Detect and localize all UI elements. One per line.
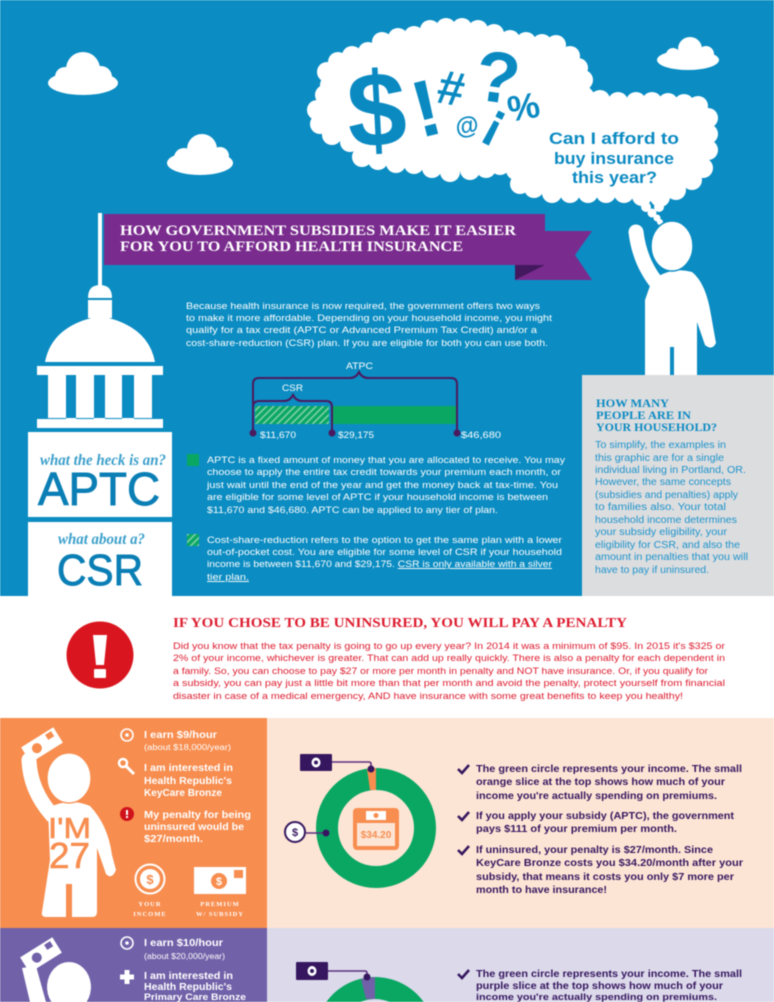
plan fact [120,970,246,1002]
symbol characters: ! [402,62,450,155]
symbol characters: @ [453,111,481,141]
plan fact [119,759,233,799]
checklist: income you're actually spending on premiums. [476,992,717,1002]
chart: APTC and CSR income ranges: $11,670 [260,430,296,441]
banner heading [120,223,516,255]
sidebar body: However, the same concepts [595,477,731,488]
penalty fact: uninsured would be [144,822,244,833]
income fact [121,729,231,752]
chart: APTC and CSR income ranges: $46,680 [461,430,501,441]
checklist: income you're actually spending on premiums. [476,791,717,802]
panel: what is APTC: what the heck is an? [40,452,166,469]
sidebar body: to families also. Your total [595,502,726,513]
symbol characters: ¡ [476,92,518,151]
sidebar heading [596,398,717,434]
legend: APTC description: choose to apply the entire tax credit towards your premium each month, or [207,467,562,478]
banner ribbon [104,214,592,280]
chart: APTC and CSR income ranges: $29,175 [338,430,374,441]
sidebar body: household income determines [595,515,737,526]
symbol characters: $ [344,50,409,171]
panel: orange profile [0,718,267,928]
icon: your income: $ [146,872,154,887]
penalty text: a subsidy, you can pay just a little bit more than that per month and avoid the penalty, protect yourself from financial [173,678,725,689]
donut chart: income vs premium [285,754,425,877]
panel: what about CSR [28,522,172,596]
icon: red alert circle [66,622,134,688]
checklist: If you apply your subsidy (APTC), the government [476,811,735,822]
intro text: to make it more affordable. Depending on your household income, you might [186,313,552,324]
icon: capitol building [37,213,163,428]
checklist: If uninsured, your penalty is $27/month. Since [476,845,713,856]
penalty text: Did you know that the tax penalty is going to go up every year? In 2014 it was a minimum of $95. In 2015 it's $325 or [173,641,726,652]
sidebar heading: HOW MANY [596,398,670,410]
legend: CSR description: tier plan. [207,572,249,583]
icon: premium with subsidy [194,867,246,918]
panel: what about CSR: what about a? [58,531,145,548]
penalty fact: My penalty for being [144,810,251,821]
symbol characters [344,35,543,171]
panel: what is APTC [28,432,172,517]
banner heading: HOW GOVERNMENT SUBSIDIES MAKE IT EASIER [120,223,516,239]
symbol characters: % [504,84,543,130]
icon: small cloud right [657,37,719,70]
sidebar body: your subsidy eligibility, your [595,527,728,538]
cloud question: buy insurance [554,150,674,168]
icon: your income: YOUR [138,901,162,908]
plan fact: KeyCare Bronze [144,788,222,799]
chart: APTC and CSR income ranges: ATPC [346,361,373,372]
sidebar body: (subsidies and penalties) apply [595,490,738,501]
checklist: orange slice at the top shows how much of your [476,777,725,788]
checklist: KeyCare Bronze costs you $34.20/month after your [476,858,743,869]
icon: person with raised arm [636,221,716,375]
panel: peach explanation [267,718,774,928]
chart: APTC and CSR income ranges: CSR [282,383,303,394]
legend: CSR description [187,534,563,583]
panel: lavender explanation [267,928,774,1002]
penalty fact [120,807,251,845]
intro text: Because health insurance is now required, the government offers two ways [186,301,540,312]
cloud question [549,130,679,187]
icon: person holding bill, age 27 [21,727,116,917]
sidebar body [595,440,748,576]
panel: purple profile [0,928,267,1002]
legend: CSR description: out-of-pocket cost. You are eligible for some level of CSR if your household [207,547,562,558]
checklist: The green circle represents your income. The small [476,764,742,775]
plan fact: I am interested in [144,971,233,982]
income fact: (about $18,000/year) [144,743,231,752]
intro text: qualify for a tax credit (APTC or Advanced Premium Tax Credit) and/or a [186,325,538,336]
legend: CSR description: income is between $11,670 and $29,175. CSR is only available with a silver [207,559,553,570]
thought cloud [307,18,718,225]
icon: your income [133,864,167,918]
sidebar body: eligibility for CSR, and also the [595,540,740,551]
penalty text: disaster in case of a medical emergency, AND have insurance with some great benefits to keep you healthy! [173,691,683,702]
icon: your income: INCOME [133,911,167,918]
sidebar body: this graphic are for a single [595,453,724,464]
legend: APTC description: are eligible for some level of APTC if your household income is between [207,492,548,503]
checklist: month to have insurance! [476,885,607,896]
symbol characters: ? [470,35,525,121]
icon: premium with subsidy: PREMIUM [200,901,240,908]
intro text [186,301,552,349]
income fact [121,937,225,961]
symbol characters: # [433,61,469,117]
income fact: I earn $9/hour [144,730,217,741]
icon: premium with subsidy: W/ SUBSIDY [196,911,244,918]
legend: APTC description: APTC is a fixed amount of money that you are allocated to receive. You may [207,455,565,466]
panel: what about CSR: CSR [57,546,143,595]
icon: person holding bill, age 27: 27 [49,835,90,876]
checklist [458,764,743,896]
icon: small cloud left [48,52,118,95]
plan fact: Primary Care Bronze [144,992,246,1002]
panel: what is APTC: APTC [38,463,160,515]
penalty text: 2% of your income, whichever is greater. That can add up really quickly. There is also a penalty for each dependent in [173,653,725,664]
income fact: I earn $10/hour [144,938,223,949]
legend: APTC description [187,454,565,516]
sidebar heading: YOUR HOUSEHOLD? [596,422,717,434]
plan fact: I am interested in [144,763,233,774]
icon: dark bill [296,962,328,980]
sidebar body: individual living in Portland, OR. [595,465,746,476]
chart: APTC and CSR income ranges [250,361,501,441]
checklist [458,969,742,1002]
legend: APTC description: $11,670 and $46,680. APTC can be applied to any tier of plan. [207,505,498,516]
icon: premium with subsidy: $ [216,876,222,888]
donut chart: income vs premium [296,962,424,1002]
checklist: pays $111 of your premium per month. [476,824,677,835]
checklist: subsidy, that means it costs you only $7 more per [476,872,734,883]
penalty heading: IF YOU CHOSE TO BE UNINSURED, YOU WILL PAY A PENALTY [173,615,627,630]
checklist: purple slice at the top shows how much of your [476,981,723,992]
penalty text [173,641,726,702]
banner heading: FOR YOU TO AFFORD HEALTH INSURANCE [120,239,463,255]
legend: CSR description: Cost-share-reduction refers to the option to get the same plan with a lower [207,535,563,546]
sidebar heading: PEOPLE ARE IN [596,410,692,422]
sidebar body: To simplify, the examples in [595,440,726,451]
icon: person holding bill, age 27: I'M [48,813,91,845]
penalty fact: $27/month. [144,834,203,845]
icon: dollar circle: $ [292,827,298,839]
icon: small cloud centre [167,134,233,175]
icon: premium amount: $34.20 [361,830,392,841]
penalty text: a family. So, you can choose to pay $27 or more per month in penalty and NOT have insurance. Or, if you qualify for [173,666,709,677]
income fact: (about $20,000/year) [144,952,225,961]
sidebar body: have to pay if uninsured. [595,565,709,576]
panel: household sidebar [582,375,774,596]
sidebar body: amount in penalties that you will [595,552,748,563]
panel: blue header background [0,0,774,596]
plan fact: Health Republic's [144,776,232,787]
legend: APTC description: just wait until the end of the year and get the money back at tax-time. You [206,480,558,491]
checklist: The green circle represents your income. The small [476,969,742,980]
cloud question: this year? [572,169,657,187]
plan fact: Health Republic's [144,982,232,993]
cloud question: Can I afford to [549,130,679,148]
icon: dark bill [300,754,332,771]
intro text: cost-share-reduction (CSR) plan. If you are eligible for both you can use both. [186,338,548,349]
icon: person holding bill [20,937,91,1002]
